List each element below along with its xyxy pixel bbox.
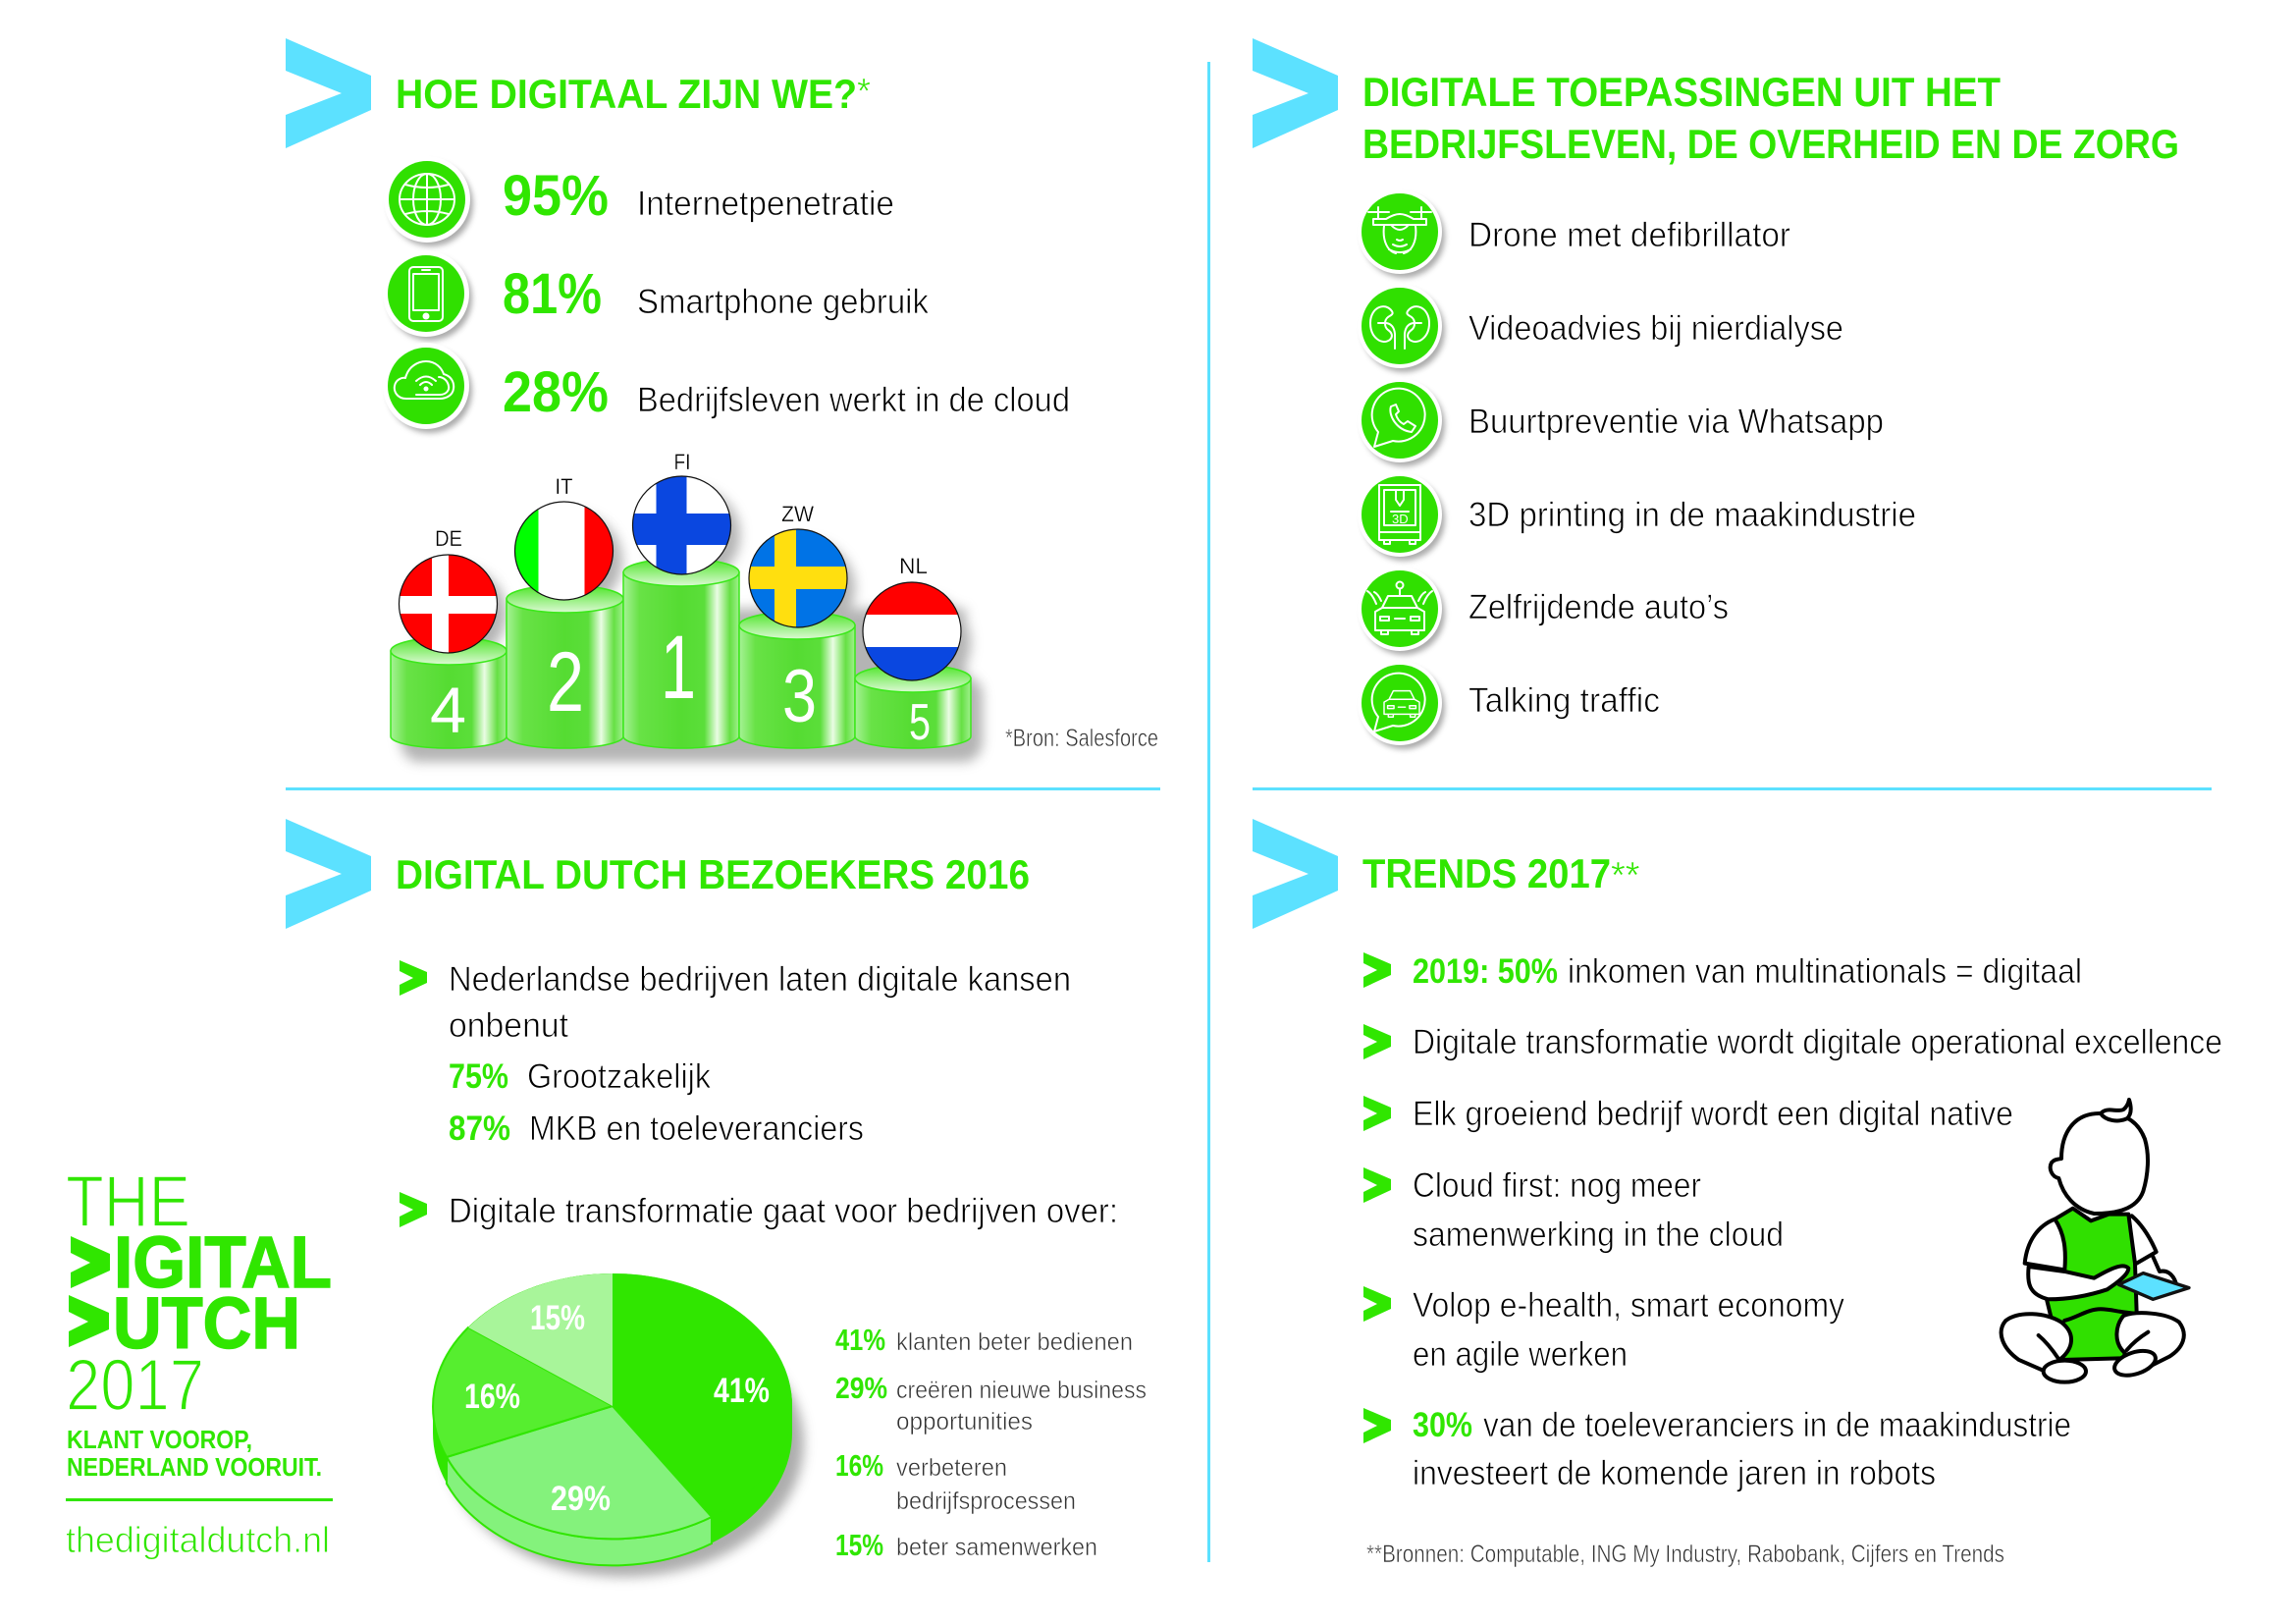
bullet text: kansen: Nederlandse bedrijven laten digitale kansen [449, 960, 1071, 999]
bullet text: kansen: MKB en toeleveranciers [529, 1110, 864, 1148]
pie legend: opportunities [896, 1408, 1033, 1435]
heading [1362, 69, 2179, 167]
podium 2 IT: 2 [547, 635, 584, 730]
chevron icon [1253, 38, 1338, 148]
flag IT [514, 479, 614, 601]
logo: the digital dutch 2017: THE [66, 1161, 190, 1242]
item: zelfrijdende autos [1358, 567, 1729, 655]
trend 5 [1363, 1286, 1844, 1374]
panel: digital dutch bezoekers [286, 819, 1147, 1577]
divider left [286, 787, 1160, 790]
flag ZW [748, 507, 848, 628]
pie legend [835, 1323, 1147, 1562]
trend 1: 2019: 50% [1413, 952, 1558, 991]
pie chart: 29% [551, 1480, 611, 1518]
trend 4: samenwerking in the cloud [1413, 1216, 1784, 1254]
pie chart: 15% [530, 1299, 585, 1337]
item: whatsapp: Buurtpreventie via Whatsapp [1468, 403, 1884, 441]
stat: internet: 95% [503, 164, 609, 228]
pie chart: 41% [714, 1372, 770, 1410]
podium 3 ZW: 3 [782, 655, 817, 738]
vertical divider [1207, 62, 1210, 1562]
logo: the digital dutch 2017: IGITAL [114, 1221, 332, 1303]
podium 5 NL: 5 [909, 694, 931, 751]
pie legend: 41% [835, 1323, 885, 1357]
flag NL: NL [899, 554, 928, 578]
trend 6: 30% [1413, 1406, 1472, 1444]
chevron icon [286, 819, 371, 929]
trend 4: Cloud first: nog meer [1413, 1166, 1701, 1205]
bullet text: kansen: onbenut [449, 1006, 568, 1045]
trend 5: en agile werken [1413, 1335, 1628, 1374]
chevron icon [286, 38, 371, 148]
trend 6: van de toeleveranciers in de maakindustrie [1483, 1406, 2071, 1444]
item: 3D printing [1358, 472, 1916, 561]
panel: digitale toepassingen [1253, 38, 2179, 749]
chevron icon [1253, 819, 1338, 929]
stat: internet [384, 156, 894, 246]
logo: the digital dutch 2017: NEDERLAND VOORUIT. [67, 1452, 322, 1482]
pie chart: 16% [464, 1378, 520, 1416]
podium 2 IT [507, 585, 623, 748]
logo: the digital dutch 2017 [66, 1161, 333, 1560]
podium 1 FI [623, 559, 739, 748]
panel: trends 2017 [1253, 819, 2222, 1568]
stat: internet: Internetpenetratie [637, 185, 894, 223]
flag ZW: ZW [781, 502, 814, 526]
logo: the digital dutch 2017: 2017 [66, 1344, 204, 1426]
item: whatsapp [1358, 378, 1884, 466]
trend 1: inkomen van multinationals = digitaal [1568, 952, 2082, 991]
pie legend: verbeteren [896, 1454, 1007, 1482]
heading: BEDRIJFSLEVEN, DE OVERHEID EN DE ZORG [1362, 121, 2179, 167]
bullet text: kansen: 75% [449, 1057, 508, 1096]
stat: smartphone [383, 250, 929, 341]
divider right [1253, 787, 2212, 790]
pie legend: 29% [835, 1371, 887, 1405]
pie legend: creëren nieuwe business [896, 1377, 1147, 1404]
pie legend: 15% [835, 1528, 883, 1562]
heading: DIGITALE TOEPASSINGEN UIT HET [1362, 69, 2001, 115]
stat: cloud: Bedrijfsleven werkt in de cloud [637, 381, 1070, 419]
heading: ** [1611, 855, 1640, 896]
pie chart [433, 1273, 804, 1577]
item: zelfrijdende autos: Zelfrijdende auto’s [1468, 588, 1729, 626]
trend 6: investeert de komende jaren in robots [1413, 1454, 1936, 1492]
source note: *Bron: Salesforce [1005, 725, 1158, 752]
pie legend: klanten beter bedienen [896, 1328, 1133, 1356]
item: nierdialyse: Videoadvies bij nierdialyse [1468, 309, 1843, 348]
item: 3D printing: 3D printing in de maakindustrie [1468, 496, 1916, 534]
flag DE: DE [435, 526, 462, 551]
bullet text: kansen: Grootzakelijk [527, 1057, 711, 1096]
logo: the digital dutch 2017: thedigitaldutch.nl [66, 1520, 330, 1560]
flag FI: FI [673, 450, 691, 474]
podium 4 DE [391, 637, 507, 748]
flag IT: IT [556, 474, 573, 499]
podium 1 FI: 1 [661, 618, 696, 718]
stat: smartphone: 81% [503, 262, 602, 326]
panel: hoe digitaal zijn we [286, 38, 1158, 762]
pie legend: bedrijfsprocessen [896, 1488, 1076, 1515]
bullet text: kansen: 87% [449, 1110, 510, 1148]
trend 4 [1363, 1166, 1784, 1254]
flag NL [862, 558, 962, 681]
flag FI [632, 454, 732, 575]
stat: cloud: 28% [503, 360, 609, 424]
illustration: baby with tablet [2002, 1100, 2189, 1382]
pie legend: 16% [835, 1448, 883, 1483]
trend 3: Elk groeiend bedrijf wordt een digital native [1413, 1095, 2013, 1133]
podium 4 DE: 4 [430, 674, 466, 746]
podium 5 NL [855, 665, 971, 751]
item: talking traffic [1358, 661, 1660, 749]
heading: HOE DIGITAAL ZIJN WE? [396, 71, 857, 117]
flag DE [399, 530, 499, 654]
trend 5: Volop e-health, smart economy [1413, 1286, 1844, 1325]
podium chart [391, 450, 983, 762]
podium 3 ZW [739, 612, 855, 748]
trend 1 [1363, 952, 2082, 991]
stat: smartphone: Smartphone gebruik [637, 283, 929, 321]
heading: DIGITAL DUTCH BEZOEKERS 2016 [396, 851, 1030, 897]
trend 2: Digitale transformatie wordt digitale operational excellence [1413, 1023, 2222, 1061]
bullet text: transformatie: Digitale transformatie gaat voor bedrijven over: [449, 1192, 1118, 1230]
item: drone [1358, 189, 1790, 278]
pie legend: beter samenwerken [896, 1534, 1097, 1561]
footnote mark: * [857, 71, 871, 111]
item: nierdialyse [1358, 284, 1843, 372]
heading: TRENDS 2017 [1362, 850, 1611, 896]
trend 6 [1363, 1406, 2071, 1492]
item: talking traffic: Talking traffic [1468, 681, 1660, 720]
item: drone: Drone met defibrillator [1468, 216, 1790, 254]
item: 3D printing: 3D [1392, 512, 1409, 526]
stat: cloud [383, 343, 1070, 433]
bullet text: kansen [400, 960, 1071, 1148]
sources note: **Bronnen: Computable, ING My Industry, Rabobank, Cijfers en Trends [1366, 1541, 2004, 1568]
logo: the digital dutch 2017: UTCH [113, 1282, 300, 1364]
logo: the digital dutch 2017: KLANT VOOROP, [67, 1425, 252, 1454]
